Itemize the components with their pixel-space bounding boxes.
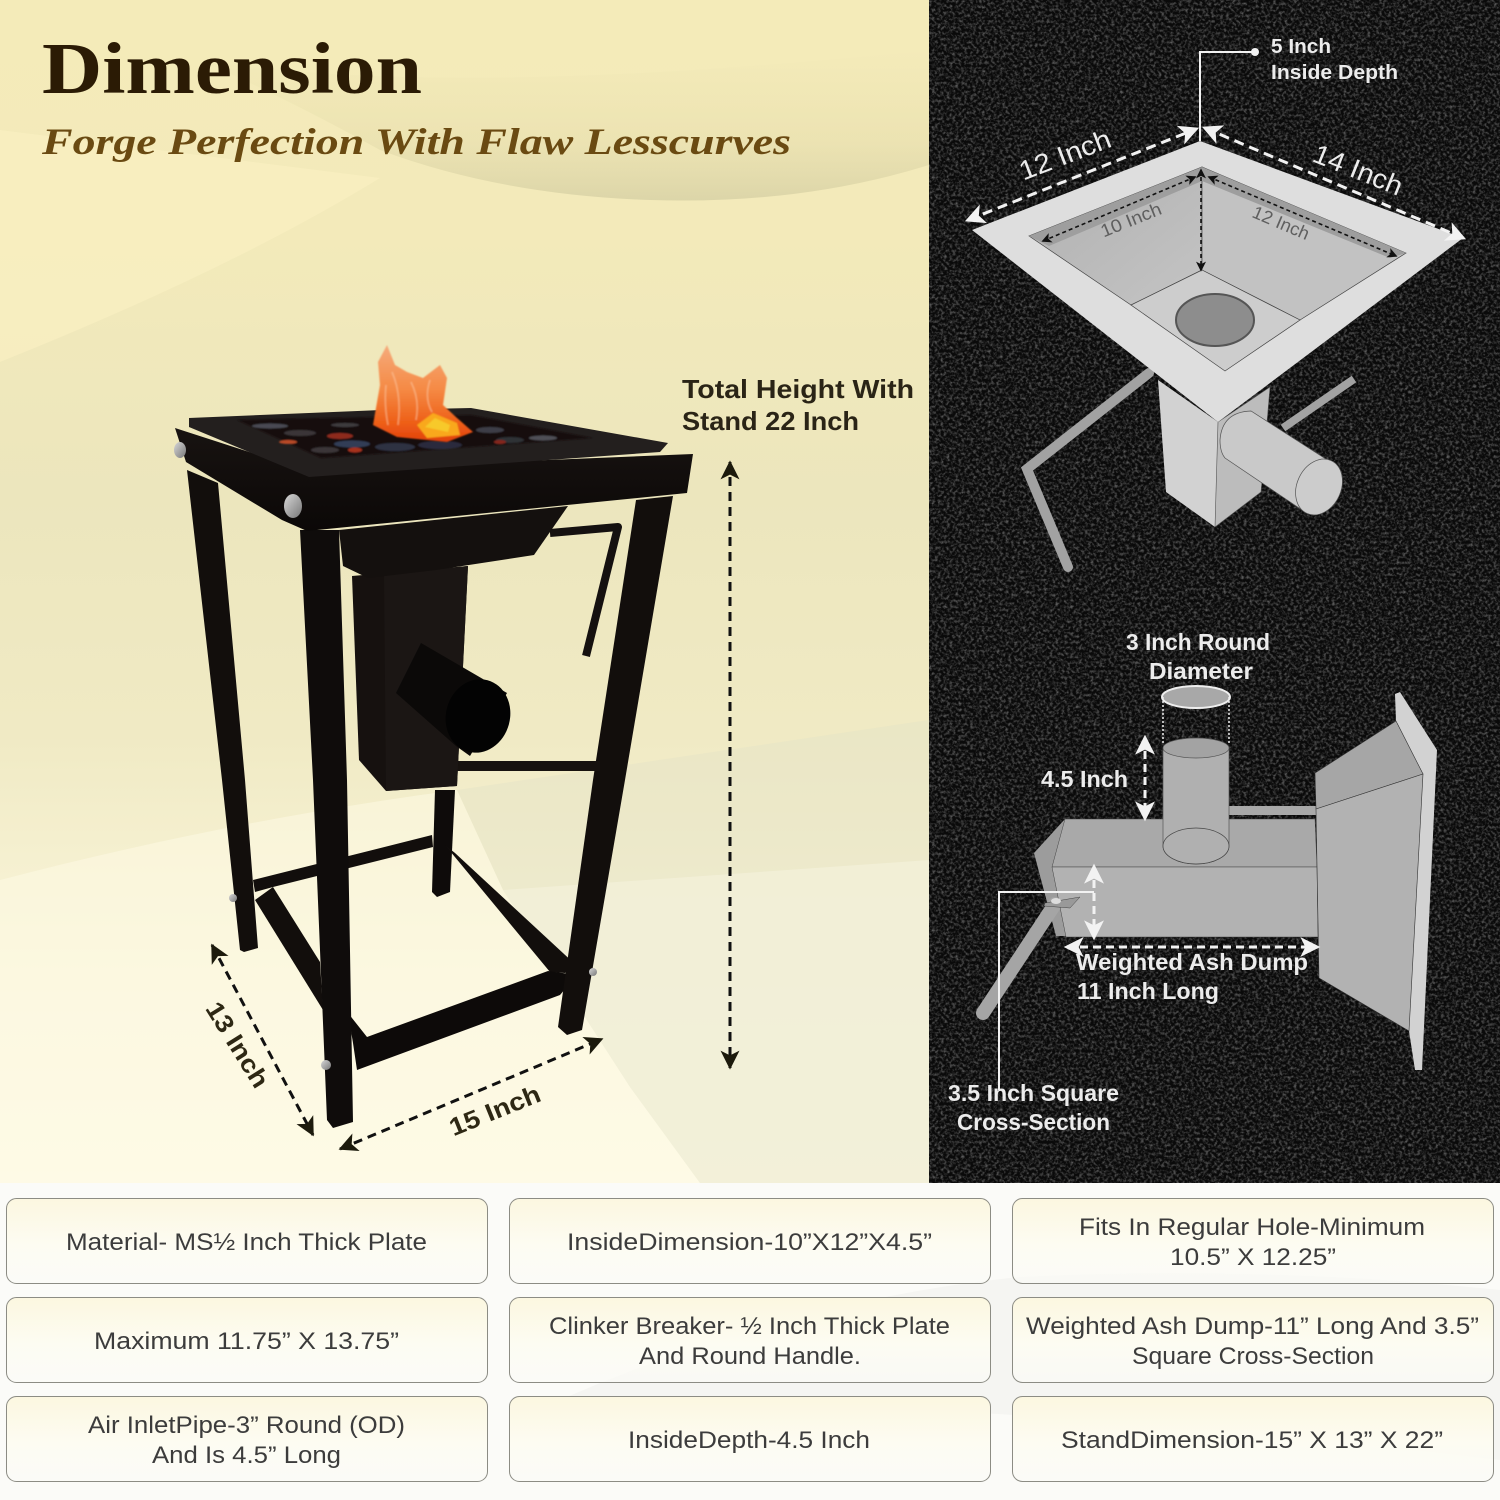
spec card: inside depth	[510, 1396, 990, 1482]
spec card: weighted ash dump: Weighted Ash Dump-11” Long And 3.5”	[1026, 1313, 1479, 1340]
air inlet pipe	[396, 643, 518, 760]
spec card: fits in regular hole: Fits In Regular Hole-Minimum	[1079, 1214, 1425, 1241]
box top	[1052, 819, 1317, 867]
diameter disc	[1162, 686, 1230, 743]
flange right	[1395, 692, 1437, 1070]
inner rim band	[1029, 167, 1406, 258]
cross bar	[455, 761, 600, 771]
spec card: stand dimension	[1012, 1396, 1494, 1482]
clinker handle	[983, 904, 1055, 1013]
spec card: clinker breaker: Clinker Breaker- ½ Inch Thick Plate	[549, 1313, 950, 1340]
spec card: clinker breaker	[510, 1298, 990, 1382]
panel: dark textured diagram panel	[929, 0, 1500, 1183]
hopper upper face	[1315, 721, 1423, 809]
floor	[1131, 270, 1300, 371]
flame	[373, 345, 473, 442]
outer dimension: 12 inch	[968, 124, 1196, 220]
outer dimension: 14 inch	[1205, 128, 1463, 238]
callout: inside depth	[1200, 36, 1398, 141]
inside dimension arrows: 10 Inch	[1098, 199, 1164, 241]
small lug	[1044, 897, 1080, 908]
spec card: material	[6, 1198, 488, 1284]
height annotation: Stand 22 Inch	[682, 406, 859, 436]
inner walls	[1029, 167, 1202, 305]
coal bed	[237, 415, 593, 458]
subtitle: Forge Perfection With Flaw Lesscurves	[41, 122, 791, 163]
outer dimension: 12 inch: 12 Inch	[1015, 124, 1115, 186]
spec card: air inlet pipe	[6, 1396, 488, 1482]
flange	[972, 141, 1463, 422]
hopper lower face	[1316, 774, 1423, 1031]
bolts	[174, 442, 597, 1070]
air pipe	[1220, 411, 1351, 523]
spec card: inside dimension: InsideDimension-10”X12”X4.5”	[567, 1229, 932, 1256]
top plate	[189, 408, 668, 477]
label: 3 inch round diameter: 3 Inch Round	[1126, 629, 1270, 655]
spec card: maximum	[6, 1298, 488, 1382]
label: square cross-section: Cross-Section	[957, 1109, 1110, 1135]
inside dimension arrows: 12 Inch	[1249, 202, 1313, 244]
label: weighted ash dump length: 11 Inch Long	[1077, 978, 1219, 1004]
width arrow: 15 inch: 15 Inch	[445, 1080, 545, 1142]
callout: inside depth: Inside Depth	[1271, 62, 1398, 84]
width arrow: 15 inch	[340, 1039, 602, 1149]
label: 4.5 inch height	[1041, 738, 1145, 818]
callout: inside depth: 5 Inch	[1271, 36, 1331, 58]
spec card: weighted ash dump: Square Cross-Section	[1132, 1343, 1374, 1370]
hopper	[339, 506, 568, 578]
spec card: material: Material- MS½ Inch Thick Plate	[66, 1229, 427, 1256]
spec card: inside depth: InsideDepth-4.5 Inch	[628, 1427, 870, 1454]
spec card: air inlet pipe: Air InletPipe-3” Round (OD)	[88, 1412, 405, 1439]
front left leg	[300, 530, 353, 1128]
label: weighted ash dump length: Weighted Ash Dump	[1076, 949, 1308, 975]
inside dimension arrows	[1043, 170, 1396, 270]
back right leg and lower frame	[253, 790, 577, 1070]
height annotation	[682, 374, 914, 1068]
spec card: clinker breaker: And Round Handle.	[639, 1343, 861, 1370]
diagram: top view of firepot	[972, 141, 1463, 567]
spec card: air inlet pipe: And Is 4.5” Long	[152, 1442, 341, 1469]
front right leg	[558, 496, 673, 1035]
depth arrow: 13 inch: 13 Inch	[200, 997, 274, 1093]
height annotation: Total Height With	[682, 374, 914, 404]
handle	[550, 527, 618, 656]
label: 3 inch round diameter	[1126, 629, 1270, 684]
label: 4.5 inch height: 4.5 Inch	[1041, 766, 1128, 792]
handles	[1027, 373, 1354, 567]
square stem	[1158, 380, 1270, 527]
depth arrow: 13 inch	[200, 945, 313, 1135]
left flap	[1034, 819, 1066, 936]
label: square cross-section: 3.5 Inch Square	[948, 1080, 1119, 1106]
drain hole	[1176, 294, 1254, 346]
outer dimension: 14 inch: 14 Inch	[1309, 138, 1407, 202]
air pipe cylinder	[1163, 738, 1229, 864]
spec card: inside dimension	[510, 1198, 990, 1284]
spec card: weighted ash dump	[1012, 1298, 1494, 1382]
spec card: stand dimension: StandDimension-15” X 13” X 22”	[1061, 1427, 1443, 1454]
back left leg	[187, 470, 258, 952]
spec card: maximum: Maximum 11.75” X 13.75”	[94, 1328, 399, 1355]
spec card: fits in regular hole	[1012, 1198, 1494, 1284]
title: Dimension	[42, 28, 422, 109]
ash dump box	[352, 566, 468, 791]
label: weighted ash dump length	[1067, 947, 1317, 1004]
panel: cream product background	[0, 0, 929, 1183]
box front	[1052, 867, 1318, 937]
rear bar	[1229, 806, 1317, 815]
top frame	[175, 428, 693, 531]
forge product illustration	[174, 345, 693, 1128]
label: square cross-section	[948, 867, 1119, 1135]
label: 3 inch round diameter: Diameter	[1149, 658, 1253, 684]
spec card: fits in regular hole: 10.5” X 12.25”	[1170, 1244, 1336, 1271]
diagram: side view of firepot	[983, 686, 1437, 1070]
